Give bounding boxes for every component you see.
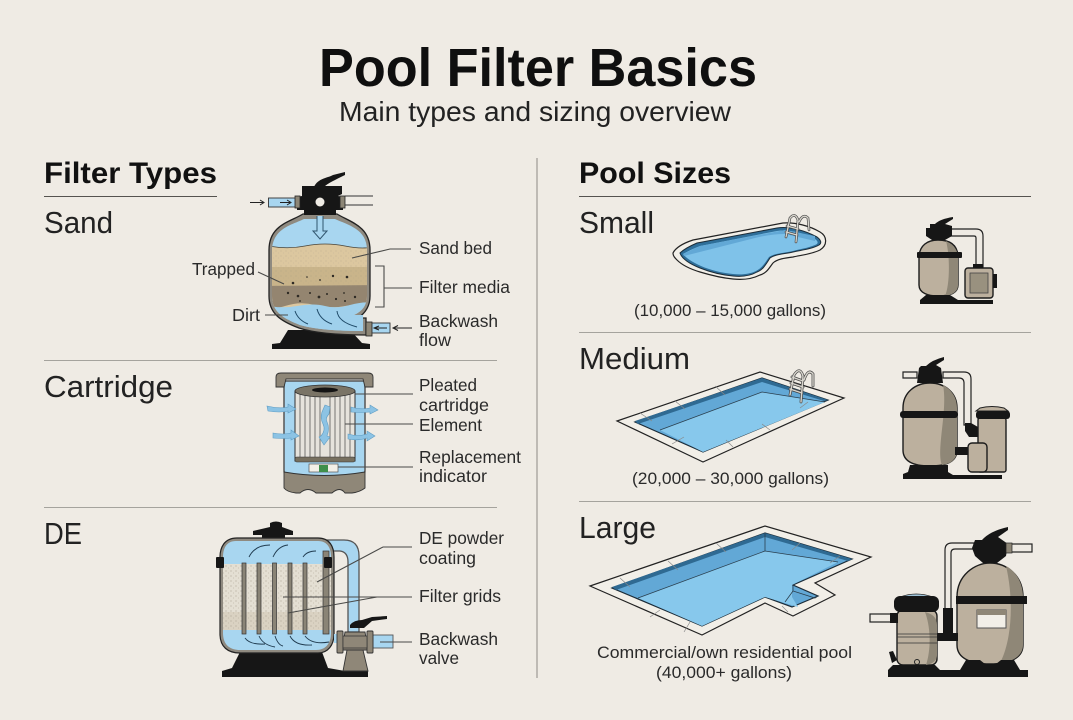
label: filter grids: Filter grids — [419, 586, 501, 606]
icon: medium pool ladder — [790, 371, 813, 402]
icon: medium filter system — [900, 357, 1010, 479]
subtitle: Main types and sizing overview — [339, 96, 732, 127]
label: DE powder coating: coating — [419, 548, 476, 568]
panel: medium pool — [579, 342, 1010, 488]
icon: multiport valve — [295, 172, 345, 215]
icon: large pool — [590, 526, 871, 635]
icon: pleated cartridge — [295, 385, 355, 462]
icon: DE base — [222, 652, 368, 677]
icon: large filter system — [870, 527, 1032, 677]
label: backwash valve: Backwash — [419, 629, 498, 649]
label: pleated cartridge: Pleated — [419, 375, 477, 395]
icon: down arrow — [313, 216, 327, 239]
label: medium gallons: (20,000 – 30,000 gallons) — [632, 469, 829, 488]
icon: medium pool — [617, 372, 844, 462]
icon: cartridge housing — [276, 373, 373, 493]
icon: DE filter grids — [242, 551, 329, 634]
label: backwash flow: Backwash — [419, 311, 498, 331]
icon: small pool ladder — [786, 215, 809, 242]
panel: large pool — [579, 511, 1032, 682]
icon: small pool — [673, 223, 826, 279]
leader lines — [258, 249, 412, 315]
panel: cartridge filter — [44, 370, 521, 493]
leader lines — [283, 547, 412, 642]
label: trapped: Trapped — [192, 259, 255, 279]
label: large description: (40,000+ gallons) — [656, 663, 792, 682]
label: backwash valve: valve — [419, 648, 459, 668]
label: dirt: Dirt — [232, 305, 260, 325]
label: sand bed: Sand bed — [419, 238, 492, 258]
label: backwash flow: flow — [419, 330, 451, 350]
label: DE powder coating: DE powder — [419, 528, 504, 548]
panel: small pool — [579, 206, 997, 320]
leader lines — [338, 394, 413, 467]
heading: filter types: Filter Types — [44, 157, 217, 190]
label: large description: Commercial/own residential pool — [597, 643, 852, 662]
icon: sand filter tank — [265, 212, 375, 337]
heading: pool sizes: Pool Sizes — [579, 157, 731, 190]
label: element: Element — [419, 415, 482, 435]
label: sand: Sand — [44, 206, 113, 240]
icon: side clamps — [216, 557, 332, 568]
icon: sand filter base — [272, 330, 370, 349]
label: replacement indicator: indicator — [419, 466, 487, 486]
icon: flow arrows — [267, 404, 378, 445]
icon: DE return pipe — [292, 540, 359, 632]
icon: inlet pipe — [250, 198, 295, 207]
icon: backwash valve — [334, 616, 393, 671]
label: medium: Medium — [579, 342, 690, 376]
panel: DE filter — [44, 517, 504, 677]
label: large: Large — [579, 511, 656, 545]
title: Pool Filter Basics — [319, 38, 757, 98]
label: pleated cartridge: cartridge — [419, 395, 489, 415]
panel: sand filter — [44, 172, 510, 350]
label: small gallons: (10,000 – 15,000 gallons) — [634, 301, 826, 320]
icon: DE lid — [253, 522, 293, 538]
icon: DE tank — [220, 538, 335, 654]
label: small: Small — [579, 206, 654, 240]
icon: small filter system — [917, 217, 997, 304]
icon: outlet pipe — [345, 196, 373, 205]
icon: DE flow arrows — [245, 545, 329, 647]
label: replacement indicator: Replacement — [419, 447, 521, 467]
label: DE: DE — [44, 517, 82, 551]
label: filter media: Filter media — [419, 277, 510, 297]
icon: replacement indicator — [309, 464, 338, 472]
icon: backwash pipe — [366, 322, 412, 336]
label: cartridge: Cartridge — [44, 370, 173, 404]
